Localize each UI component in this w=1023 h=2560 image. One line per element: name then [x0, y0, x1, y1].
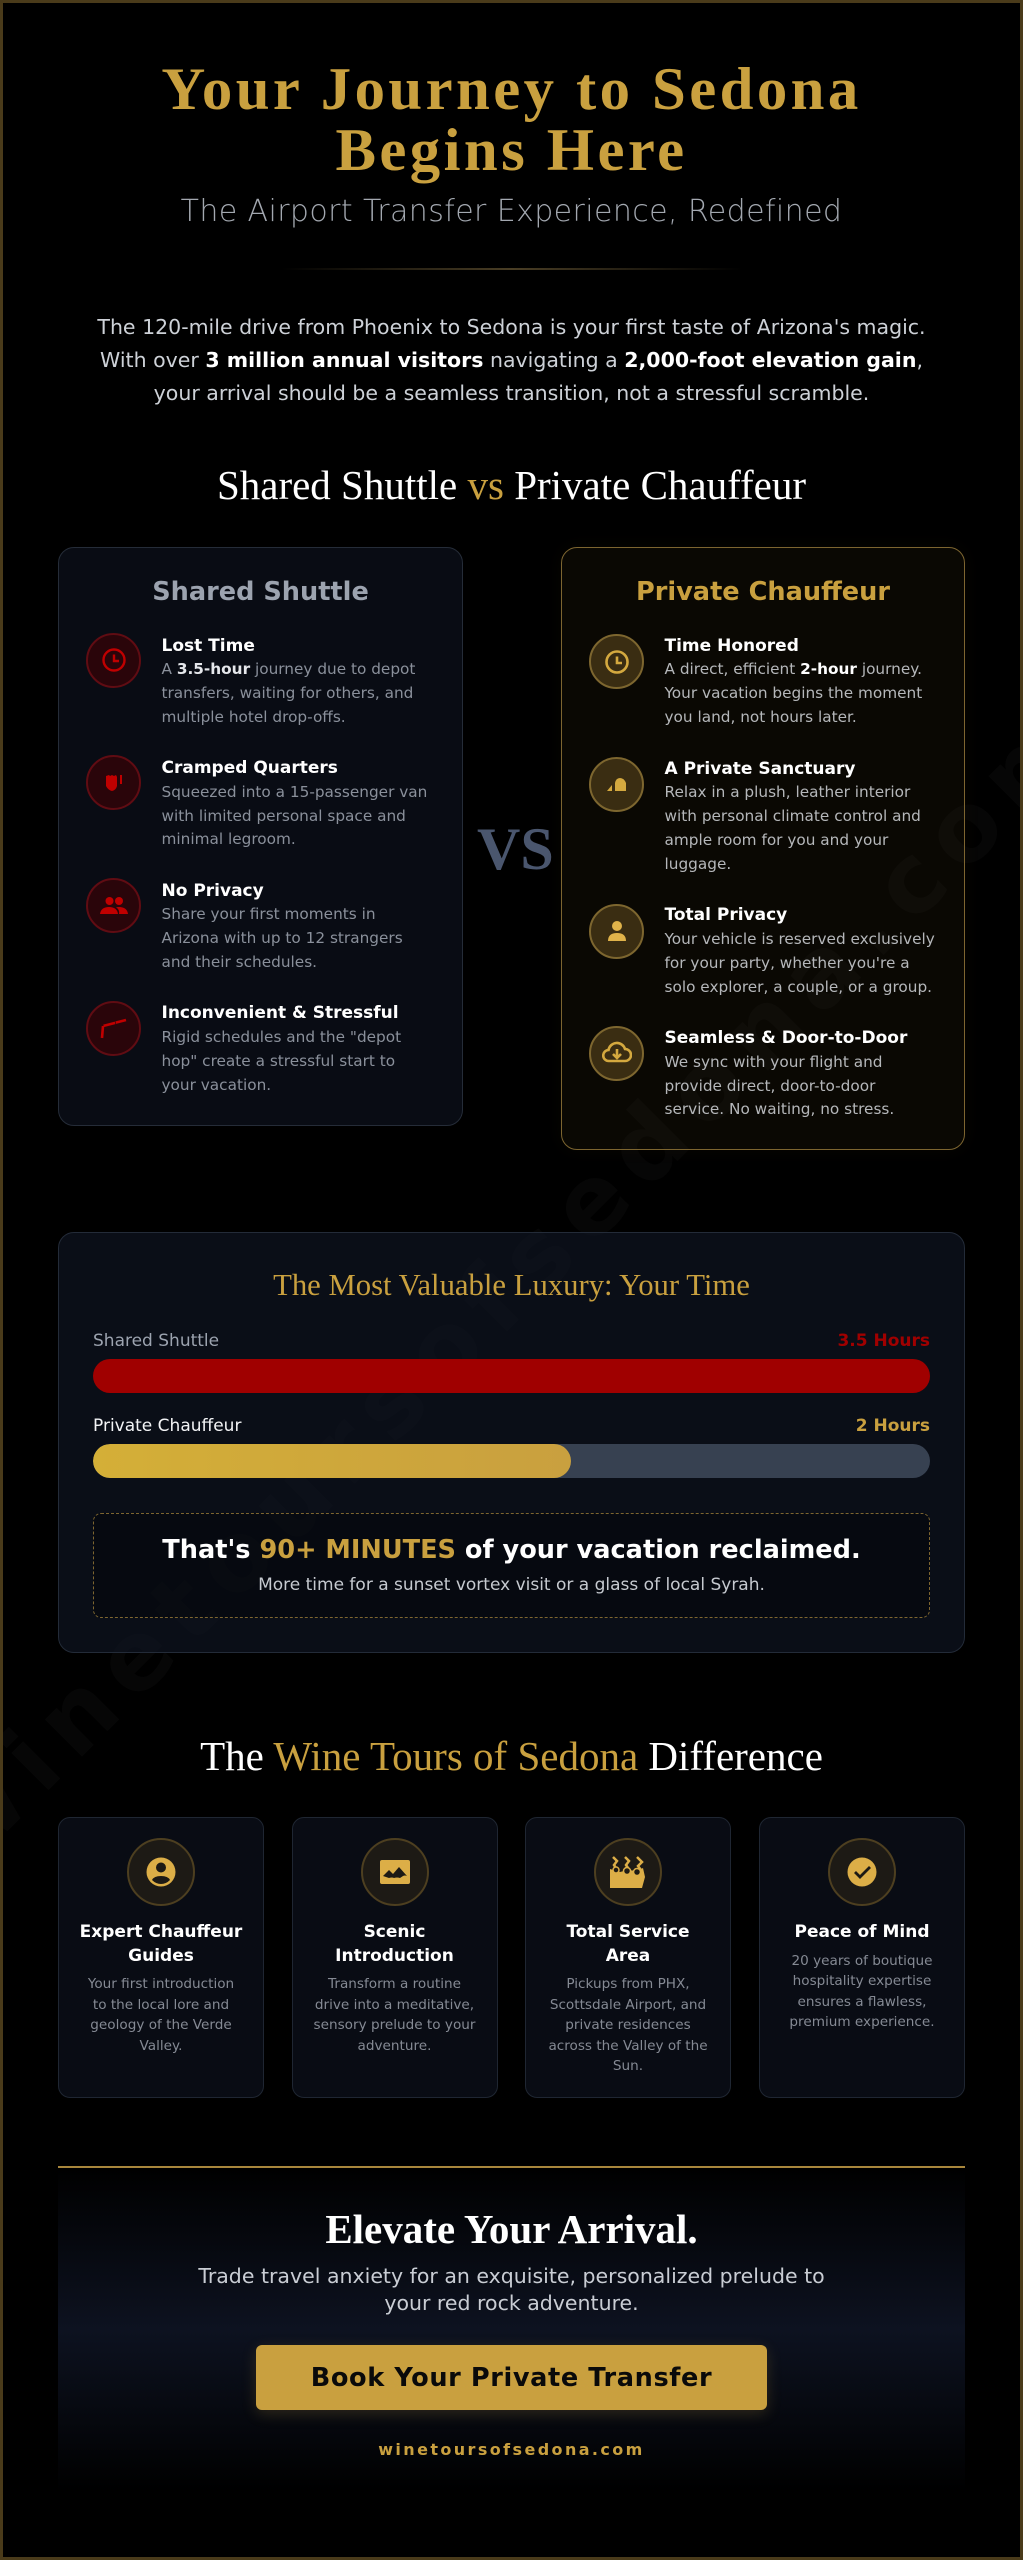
- intro paragraph: The 120-mile drive from Phoenix to Sedona is your first taste of Arizona's magic.: [97, 314, 926, 338]
- item: total privacy: solo explorer, a couple, or a group.: [664, 978, 932, 996]
- panel: private chauffeur: [561, 547, 965, 1150]
- item: time honored: Your vacation begins the moment: [664, 684, 922, 702]
- heading: private chauffeur: Private Chauffeur: [636, 577, 890, 607]
- item: inconvenient and stressful: hop" create a stressful start to: [162, 1052, 395, 1070]
- title: [161, 56, 862, 184]
- bar: private chauffeur: [93, 1444, 930, 1478]
- intro paragraph: With over 3 million annual visitors navigating a 2,000-foot elevation gain,: [100, 348, 923, 372]
- icon: cramped hand: [86, 755, 141, 810]
- heading: shared shuttle: Shared Shuttle: [152, 577, 369, 607]
- panel: time comparison: [58, 1232, 965, 1653]
- card text: Your first introduction: [88, 1976, 234, 1992]
- card title: Area: [606, 1946, 650, 1966]
- item: cramped quarters: with limited personal space and: [162, 807, 406, 825]
- item: inconvenient and stressful: Rigid schedules and the "depot: [162, 1028, 401, 1046]
- item: inconvenient and stressful: Inconvenient & Stressful: [162, 1003, 399, 1023]
- item: cramped quarters: [162, 758, 427, 848]
- item: private sanctuary: luggage.: [664, 855, 731, 873]
- item: seamless door to door: provide direct, door-to-door: [664, 1077, 875, 1095]
- item: inconvenient and stressful: [162, 1003, 401, 1094]
- card text: geology of the Verde: [90, 2017, 232, 2033]
- title: Begins Here: [335, 117, 688, 184]
- call to action text: [198, 2264, 825, 2315]
- icon: check circle: [828, 1838, 896, 1906]
- card title: Guides: [128, 1946, 194, 1966]
- icon: cloud download: [589, 1026, 644, 1080]
- website address: winetoursofsedona.com: [378, 2440, 645, 2459]
- card text: Valley.: [140, 2038, 182, 2054]
- callout subtext: More time for a sunset vortex visit or a glass of local Syrah.: [258, 1575, 765, 1595]
- item: total privacy: Total Privacy: [664, 905, 787, 925]
- card text: to the local lore and: [93, 1996, 229, 2012]
- item: time honored: [664, 636, 922, 726]
- icon: landscape image: [360, 1838, 428, 1906]
- icon: person: [589, 904, 644, 958]
- heading: most valuable luxury: The Most Valuable Luxury: Your Time: [273, 1268, 750, 1302]
- item: lost time: [162, 636, 415, 726]
- card text: adventure.: [358, 2038, 431, 2054]
- bar: shared shuttle: [93, 1359, 930, 1393]
- item: cramped quarters: minimal legroom.: [162, 830, 296, 848]
- card text: [789, 1952, 935, 2030]
- heading: difference: The Wine Tours of Sedona Difference: [200, 1732, 823, 1778]
- call to action text: Trade travel anxiety for an exquisite, personalized prelude to: [198, 2264, 825, 2288]
- item: seamless door to door: We sync with your flight and: [664, 1053, 882, 1071]
- item: total privacy: Your vehicle is reserved exclusively: [664, 930, 935, 948]
- item: lost time: transfers, waiting for others, and: [162, 684, 413, 702]
- item: cramped quarters: Squeezed into a 15-passenger van: [162, 783, 427, 801]
- item: no privacy: No Privacy: [162, 881, 264, 901]
- item: seamless door to door: service. No waiting, no stress.: [664, 1100, 894, 1118]
- card text: Pickups from PHX,: [566, 1976, 690, 1992]
- item: no privacy: Share your first moments in: [162, 905, 376, 923]
- callout headline: That's 90+ MINUTES of your vacation reclaimed.: [162, 1535, 861, 1565]
- item: time honored: A direct, efficient 2-hour journey.: [664, 660, 922, 678]
- item: total privacy: for your party, whether you're a: [664, 954, 910, 972]
- card title: Introduction: [335, 1946, 454, 1966]
- card text: 20 years of boutique: [791, 1952, 933, 1968]
- panel: call to action: [58, 2166, 965, 2492]
- card text: hospitality expertise: [793, 1973, 931, 1989]
- item: time honored: Time Honored: [664, 636, 799, 656]
- card title: Scenic: [364, 1922, 425, 1942]
- button: book transfer: Book Your Private Transfer: [311, 2363, 712, 2393]
- card: expert chauffeur guides: [58, 1817, 264, 2098]
- panel: shared shuttle: [58, 547, 463, 1126]
- card: total service area: [525, 1817, 731, 2098]
- icon: broken route: [86, 1000, 141, 1056]
- item: lost time: multiple hotel drop-offs.: [162, 708, 346, 726]
- intro paragraph: [97, 314, 926, 405]
- item: seamless door to door: Seamless & Door-to-Door: [664, 1028, 907, 1048]
- intro paragraph: your arrival should be a seamless transition, not a stressful scramble.: [154, 381, 869, 405]
- item: no privacy: and their schedules.: [162, 953, 317, 971]
- item: total privacy: [664, 905, 935, 996]
- item: time honored: you land, not hours later.: [664, 708, 857, 726]
- title: Your Journey to Sedona: [161, 56, 862, 123]
- card text: [548, 1976, 708, 2074]
- item: no privacy: [162, 881, 403, 971]
- heading: comparison: Shared Shuttle vs Private Chauffeur: [217, 462, 806, 508]
- call to action text: your red rock adventure.: [384, 2291, 639, 2315]
- bar value: shared shuttle: 3.5 Hours: [837, 1331, 930, 1351]
- item: private sanctuary: Relax in a plush, leather interior: [664, 783, 910, 801]
- icon: clock: [589, 634, 644, 689]
- card text: [314, 1976, 476, 2054]
- card text: ensures a flawless,: [797, 1994, 927, 2010]
- item: private sanctuary: ample room for you and your: [664, 831, 888, 849]
- item: private sanctuary: A Private Sanctuary: [664, 759, 855, 779]
- card title: Peace of Mind: [794, 1922, 930, 1942]
- item: no privacy: Arizona with up to 12 strangers: [162, 929, 403, 947]
- divider: [256, 268, 768, 270]
- card title: [335, 1922, 454, 1966]
- icon: service area: [594, 1838, 662, 1906]
- icon: group of people: [86, 878, 141, 933]
- card text: premium experience.: [789, 2014, 935, 2030]
- call to action heading: Elevate Your Arrival.: [325, 2206, 698, 2252]
- item: private sanctuary: with personal climate control and: [664, 807, 921, 825]
- card text: Scottsdale Airport, and: [550, 1996, 706, 2012]
- card title: Total Service: [566, 1922, 690, 1942]
- card text: [88, 1976, 234, 2054]
- bar label: shared shuttle: Shared Shuttle: [93, 1331, 219, 1351]
- item: seamless door to door: [664, 1028, 908, 1118]
- item: lost time: A 3.5-hour journey due to depot: [162, 660, 415, 678]
- icon: clock: [86, 632, 141, 688]
- card text: drive into a meditative,: [315, 1996, 474, 2012]
- icon: private cabin: [589, 756, 644, 812]
- button: book transfer: [256, 2345, 767, 2410]
- bar label: private chauffeur: Private Chauffeur: [93, 1416, 241, 1436]
- card text: across the Valley of the: [548, 2038, 708, 2054]
- card: scenic introduction: [292, 1817, 498, 2098]
- item: private sanctuary: [664, 759, 921, 873]
- card title: [80, 1922, 242, 1966]
- card title: Expert Chauffeur: [80, 1922, 242, 1942]
- card text: Sun.: [613, 2058, 643, 2074]
- item: inconvenient and stressful: your vacation.: [162, 1076, 271, 1094]
- callout: minutes reclaimed: [93, 1513, 930, 1618]
- bar value: private chauffeur: 2 Hours: [856, 1416, 930, 1436]
- subtitle: The Airport Transfer Experience, Redefined: [181, 194, 842, 229]
- card text: Transform a routine: [328, 1976, 461, 1992]
- icon: user circle: [127, 1838, 195, 1906]
- card text: private residences: [565, 2017, 691, 2033]
- versus label: VS: [477, 816, 554, 882]
- card text: sensory prelude to your: [314, 2017, 475, 2033]
- item: cramped quarters: Cramped Quarters: [162, 758, 338, 778]
- card: peace of mind: [759, 1817, 965, 2098]
- item: lost time: Lost Time: [162, 636, 255, 656]
- card title: [566, 1922, 690, 1966]
